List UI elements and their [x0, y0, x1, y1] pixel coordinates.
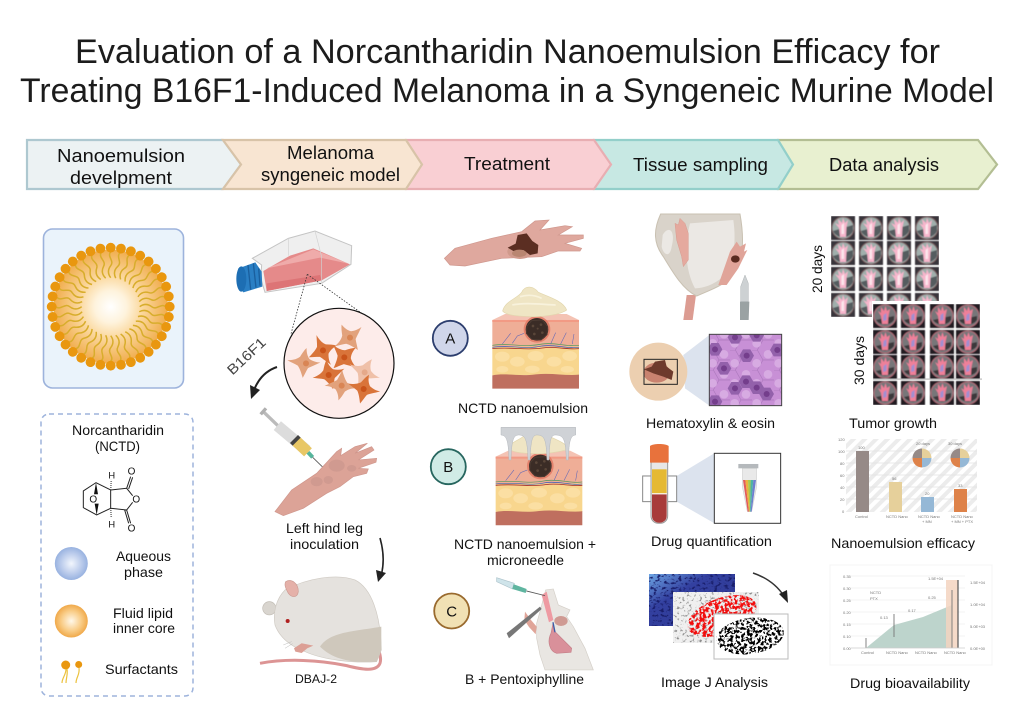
dotted zoom lines: [291, 274, 362, 335]
bar chart: nanoemulsion efficacy: 60: [840, 473, 845, 478]
bar chart: nanoemulsion efficacy: 20: [925, 491, 930, 496]
label: NCTD nanoemulsion + microneedle: microneedle: [487, 552, 564, 568]
icon: norcantharidin molecule: O: [128, 466, 136, 477]
inoculation label: inoculation: [290, 536, 359, 552]
bar chart: nanoemulsion efficacy: 40: [840, 485, 845, 490]
bar chart: nanoemulsion efficacy: 33: [958, 483, 963, 488]
panel: melanoma syngeneic model: [224, 231, 394, 686]
area chart: drug bioavailability: 0.13: [880, 615, 889, 620]
step: data analysis: Data analysis: [829, 154, 939, 175]
icon: mouse with excised paw: [655, 214, 749, 320]
bar chart: nanoemulsion efficacy: + MN: [922, 519, 932, 524]
label: Image J Analysis: Image J Analysis: [661, 674, 768, 690]
badge B: B: [443, 459, 453, 476]
step: nanoemulsion development: develpment: [70, 167, 172, 188]
bar chart: nanoemulsion efficacy: [838, 437, 977, 524]
badge C: C: [446, 603, 457, 620]
legend item: aqueous phase: [55, 547, 171, 580]
label: Hematoxylin & eosin: Hematoxylin & eosin: [646, 415, 775, 431]
label: NCTD nanoemulsion + microneedle: [454, 536, 596, 568]
legend heading: [72, 422, 164, 454]
panel: nanoemulsion droplet: [44, 229, 184, 388]
label: Drug quantification: Drug quantification: [651, 533, 772, 549]
area chart: drug bioavailability: Control: [861, 650, 874, 655]
area chart: drug bioavailability: 0.35: [843, 574, 852, 579]
legend item: fluid lipid inner core: Fluid lipid: [113, 605, 173, 621]
icon: norcantharidin molecule: O: [132, 494, 140, 505]
image: blue stained tissue: [649, 574, 735, 626]
arrow: inoculation to mouse: [376, 538, 386, 582]
title: Treating B16F1-Induced Melanoma in a Syngeneic Murine Model: [20, 72, 994, 110]
icon: hematoxylin and eosin zoom: [629, 329, 785, 408]
icon: blood tube and eppendorf: [643, 444, 781, 523]
step: treatment: [406, 140, 611, 189]
step: nanoemulsion development: [27, 140, 241, 189]
bar chart: nanoemulsion efficacy: 120: [838, 437, 845, 442]
badge A: A: [445, 330, 455, 348]
label: Drug bioavailability: Drug bioavailability: [850, 675, 970, 691]
bar chart: nanoemulsion efficacy: 100: [838, 449, 845, 454]
bar chart: nanoemulsion efficacy: 20: [840, 497, 845, 502]
area chart: drug bioavailability: NCTD Nano: [915, 650, 938, 655]
area chart: drug bioavailability: 1.5E+04: [928, 576, 944, 581]
droplet core and surfactant shell: [47, 243, 175, 371]
step: melanoma syngeneic model: [223, 140, 422, 189]
label: 20 days: 20 days: [809, 245, 825, 293]
area chart: drug bioavailability: 1.0E+04: [970, 602, 986, 607]
label: Nanoemulsion efficacy: Nanoemulsion efficacy: [831, 535, 975, 551]
icon: hind leg: [275, 443, 377, 516]
area chart: drug bioavailability: 0.25: [928, 595, 937, 600]
panel: treatment: [431, 220, 596, 687]
inoculation label: [286, 520, 363, 552]
bar chart: nanoemulsion efficacy: 100: [858, 445, 865, 450]
area chart: drug bioavailability: 0.15: [843, 622, 852, 627]
icon: culture flask: [236, 231, 352, 292]
label: NCTD nanoemulsion + microneedle: NCTD nanoemulsion +: [454, 536, 596, 552]
DBAJ-2 label: DBAJ-2: [295, 672, 337, 686]
area chart: drug bioavailability: 0.00: [843, 646, 852, 651]
legend item: fluid lipid inner core: inner core: [113, 620, 175, 636]
icon: norcantharidin molecule: [83, 466, 140, 535]
pie chart: 30 days: [950, 448, 970, 468]
step: melanoma syngeneic model: syngeneic model: [261, 164, 400, 185]
icon: norcantharidin molecule: O: [89, 494, 97, 505]
step: nanoemulsion development: Nanoemulsion: [57, 145, 185, 166]
legend item: surfactants: Surfactants: [105, 661, 178, 677]
bar chart: nanoemulsion efficacy: 20 days: [916, 441, 930, 446]
bar chart: nanoemulsion efficacy: NCTD Nano: [951, 514, 974, 519]
icon: B16F1 cells magnified: [284, 308, 394, 418]
area chart: drug bioavailability: 0.0E+00: [970, 646, 986, 651]
legend item: fluid lipid inner core: [55, 604, 175, 638]
label: B + Pentoxiphylline: B + Pentoxiphylline: [465, 671, 584, 687]
label: 30 days: 30 days: [851, 336, 867, 385]
B16F1 label: B16F1: [224, 334, 269, 378]
image: black binary mask: [714, 614, 788, 659]
label: Tumor growth: Tumor growth: [849, 415, 937, 431]
icon: syringe: [261, 408, 326, 470]
title: [20, 33, 994, 110]
inoculation label: Left hind leg: [286, 520, 363, 536]
area chart: drug bioavailability: NCTD Nano: [886, 650, 909, 655]
icon: norcantharidin molecule: H: [108, 470, 115, 480]
bar chart: nanoemulsion efficacy: 0: [842, 509, 845, 514]
image: red thresholded tissue: [673, 592, 759, 643]
legend heading: Norcantharidin: [72, 422, 164, 438]
badge C: [434, 594, 469, 628]
bar chart: nanoemulsion efficacy: + MN + PTX: [951, 519, 973, 524]
bar chart: nanoemulsion efficacy: 56: [892, 476, 897, 481]
area chart: drug bioavailability: 0.30: [843, 586, 852, 591]
bar chart: nanoemulsion efficacy: 80: [840, 461, 845, 466]
workflow arrow banner: [27, 140, 997, 189]
area chart: drug bioavailability: 5.0E+03: [970, 624, 986, 629]
area chart: drug bioavailability: 0.10: [843, 634, 852, 639]
arrow: cells to syringe: [250, 367, 277, 399]
step: treatment: Treatment: [464, 153, 550, 174]
step: tissue sampling: [594, 140, 793, 189]
panel: tissue sampling: [629, 214, 788, 690]
icon: mouse injection: [497, 578, 593, 670]
panel: data analysis: [809, 216, 992, 691]
badge B: [431, 449, 466, 484]
icon: norcantharidin molecule: H: [108, 519, 115, 529]
icon: paw with melanoma: [444, 220, 583, 266]
photo grid: 20 days: [831, 216, 939, 317]
area chart: drug bioavailability: 0.20: [843, 610, 852, 615]
area chart: drug bioavailability: NCTD: [870, 590, 881, 595]
bar chart: nanoemulsion efficacy: NCTD Nano: [918, 514, 941, 519]
legend item: aqueous phase: Aqueous: [116, 548, 171, 564]
area chart: drug bioavailability: NCTD Nano: [944, 650, 967, 655]
icon: skin with cream: [492, 287, 579, 389]
area chart: drug bioavailability: 0.25: [843, 598, 852, 603]
bar chart: nanoemulsion efficacy: 30 days: [948, 441, 962, 446]
area chart: drug bioavailability: 1.5E+04: [970, 580, 986, 585]
icon: norcantharidin molecule: O: [128, 524, 136, 535]
area chart: drug bioavailability: PTX: [870, 596, 878, 601]
arrow: image processing: [753, 573, 788, 603]
step: tissue sampling: Tissue sampling: [633, 154, 768, 175]
bar chart: nanoemulsion efficacy: Control: [855, 514, 868, 519]
icon: DBA/2 mouse: [260, 577, 381, 669]
panel: legend: [41, 414, 193, 696]
area chart: drug bioavailability: [830, 565, 992, 665]
legend heading: (NCTD): [95, 438, 140, 454]
legend item: aqueous phase: phase: [124, 564, 163, 580]
bar chart: nanoemulsion efficacy: NCTD Nano: [886, 514, 909, 519]
badge A: [433, 321, 468, 356]
step: data analysis: [778, 140, 997, 189]
label: NCTD nanoemulsion: NCTD nanoemulsion: [458, 400, 588, 416]
step: melanoma syngeneic model: Melanoma: [287, 142, 375, 163]
photo grid: 30 days: [872, 301, 984, 407]
icon: skin with microneedles: [496, 427, 582, 525]
area chart: drug bioavailability: 0.17: [908, 608, 917, 613]
legend item: surfactants: [61, 660, 178, 683]
title: Evaluation of a Norcantharidin Nanoemulsion Efficacy for: [75, 33, 940, 71]
pie chart: 20 days: [912, 448, 932, 468]
